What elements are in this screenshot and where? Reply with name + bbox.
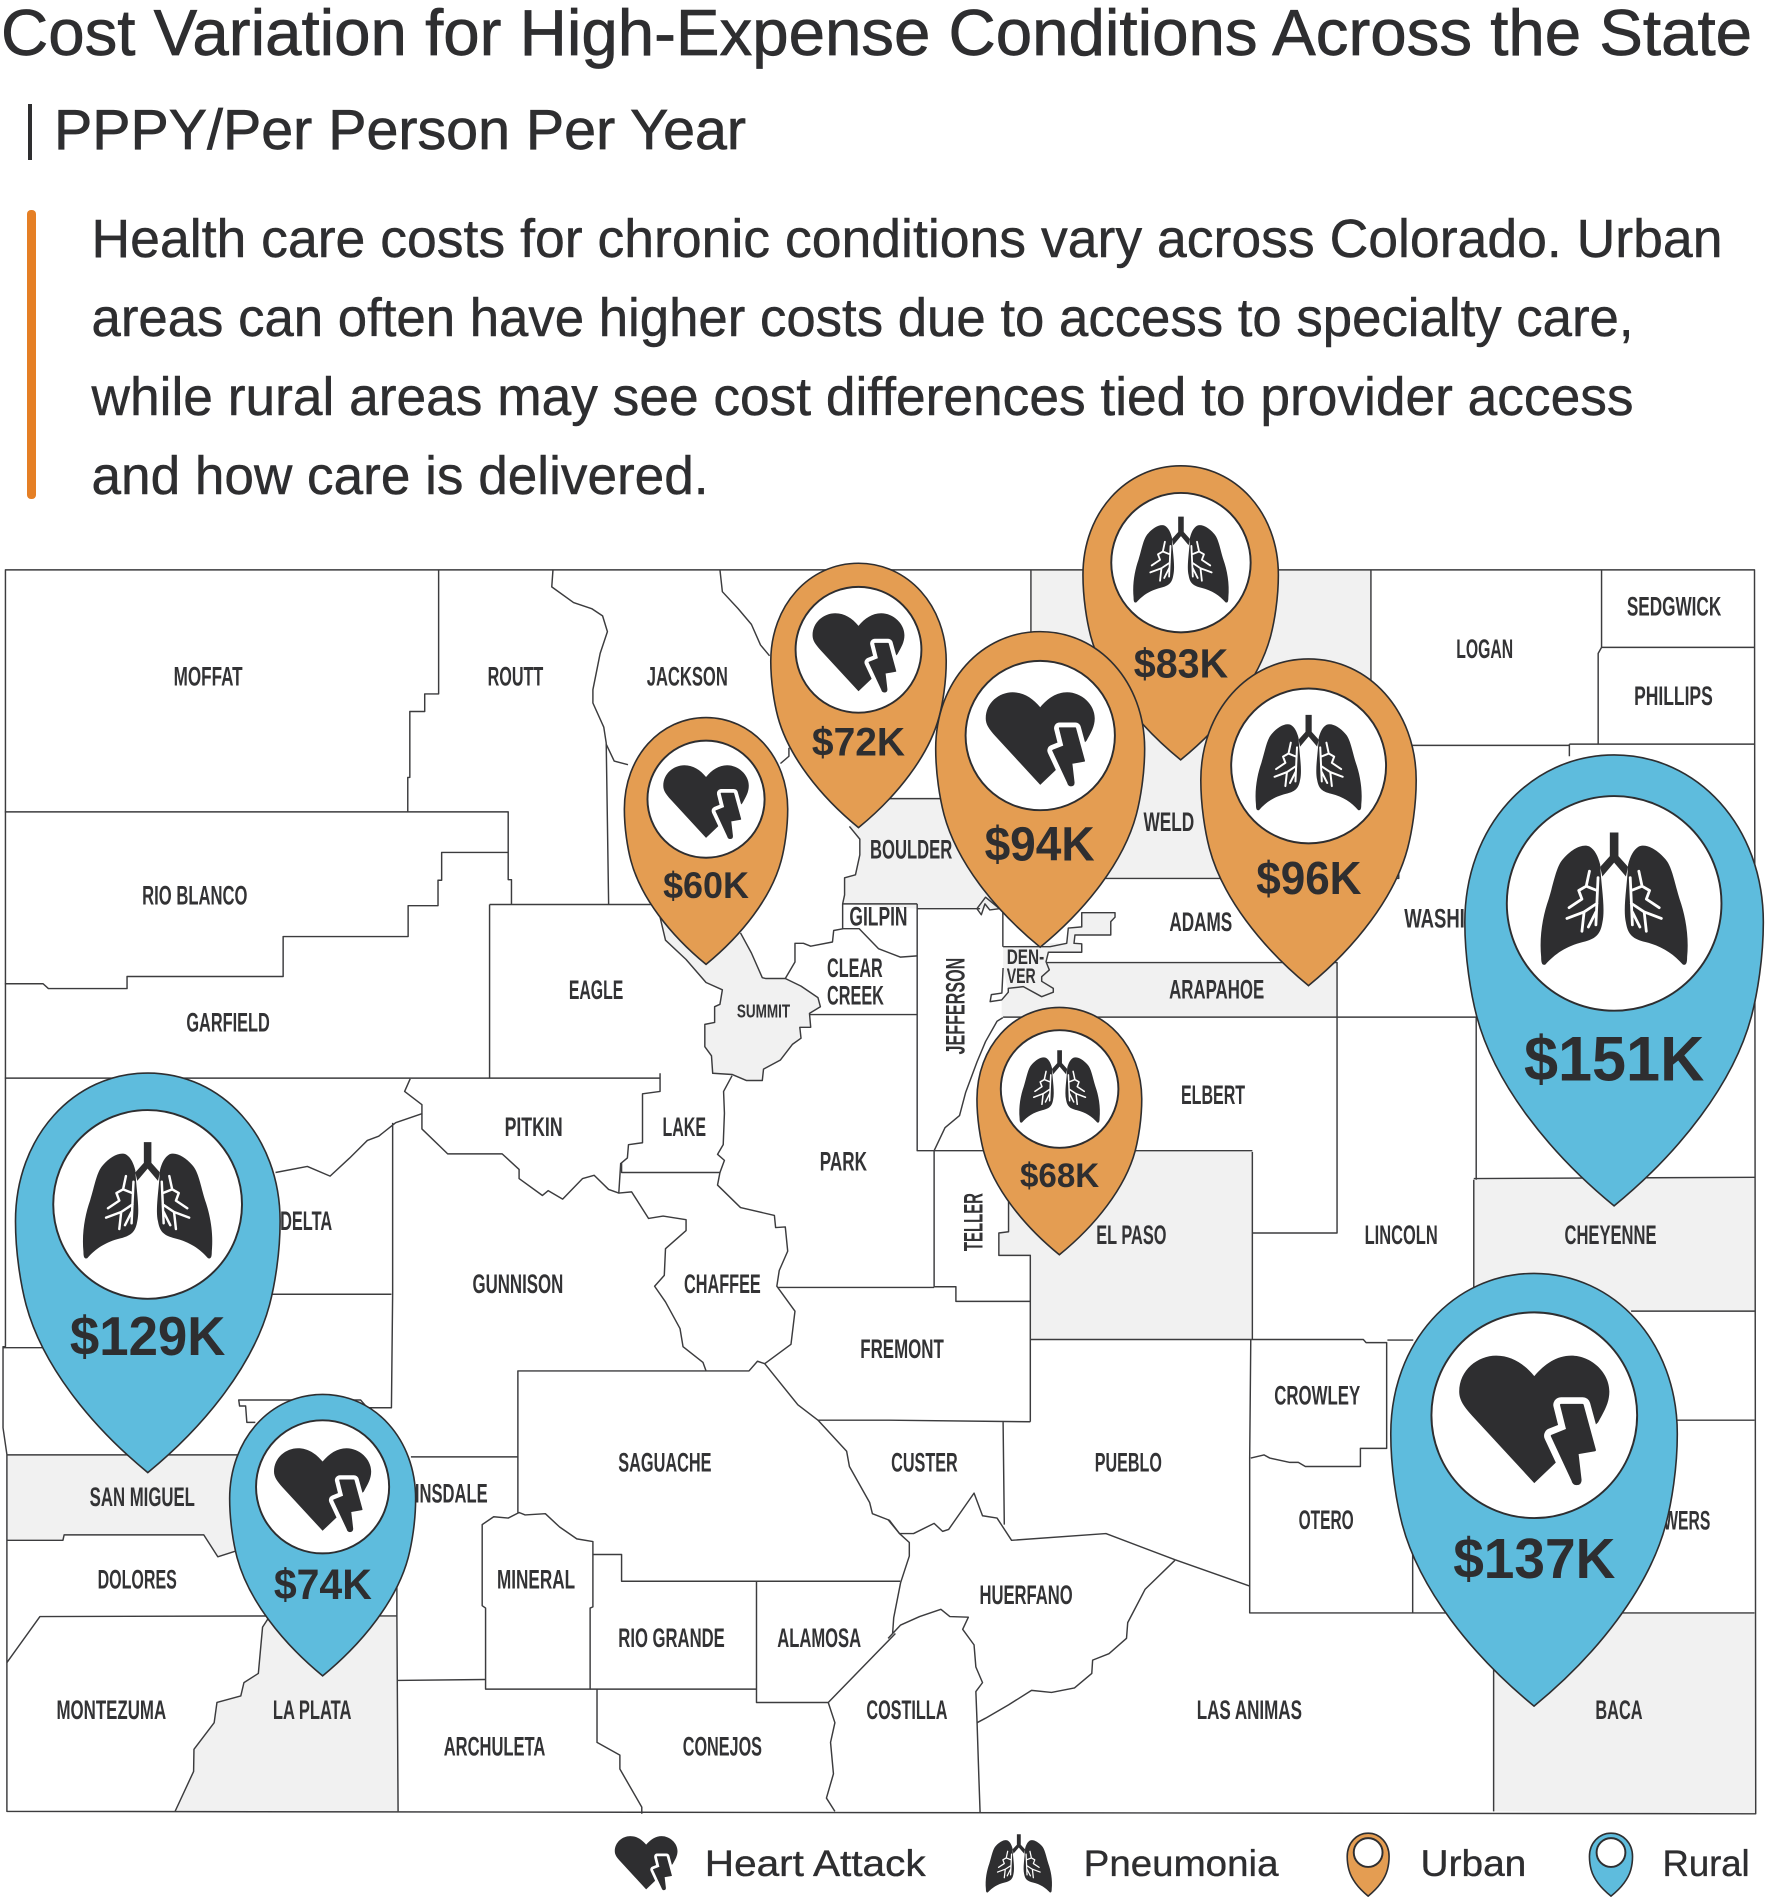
- county labels: VER: [1007, 964, 1036, 988]
- legend icon: pneumonia: [986, 1834, 1052, 1892]
- pin: rural pneumonia $151K: [1465, 755, 1763, 1206]
- county labels: PHILLIPS: [1634, 681, 1713, 711]
- county labels: EL PASO: [1096, 1220, 1166, 1250]
- county labels: SEDGWICK: [1627, 591, 1721, 621]
- county labels: HUERFANO: [979, 1580, 1073, 1610]
- county labels: COSTILLA: [866, 1695, 947, 1725]
- county labels: SAGUACHE: [618, 1447, 711, 1477]
- county labels: CUSTER: [891, 1447, 958, 1477]
- county labels: LAS ANIMAS: [1197, 1695, 1302, 1725]
- county labels: ROUTT: [488, 661, 543, 691]
- county labels: ALAMOSA: [777, 1623, 861, 1653]
- pin: urban pneumonia $83K: [1083, 466, 1278, 760]
- pin: urban heart attack $72K: [771, 563, 946, 828]
- pin: rural heart attack $137K: [1391, 1273, 1677, 1706]
- county labels: JACKSON: [647, 661, 728, 691]
- county labels: CHEYENNE: [1565, 1220, 1656, 1250]
- county labels: CHAFFEE: [684, 1269, 761, 1299]
- county labels: LOGAN: [1456, 634, 1513, 664]
- intro paragraph: while rural areas may see cost differences tied to provider access: [91, 368, 1634, 427]
- pin: rural pneumonia $129K: $129K: [70, 1306, 225, 1367]
- intro paragraph: Health care costs for chronic conditions vary across Colorado. Urban: [92, 210, 1722, 269]
- county labels: LAKE: [662, 1112, 706, 1142]
- county labels: RIO BLANCO: [142, 880, 247, 910]
- county labels: MINERAL: [497, 1565, 575, 1595]
- pin: urban heart attack $94K: [936, 632, 1145, 947]
- orange accent bar: [27, 210, 36, 499]
- legend icon: urban pin: [1347, 1833, 1389, 1896]
- pin: rural pneumonia $129K: [15, 1073, 280, 1473]
- county map of Colorado: [3, 570, 1756, 1814]
- county labels: CLEAR: [827, 953, 883, 983]
- county labels: CROWLEY: [1274, 1381, 1360, 1411]
- county labels: PUEBLO: [1095, 1447, 1162, 1477]
- pin: urban heart attack $72K: $72K: [812, 721, 905, 765]
- county labels: HINSDALE: [403, 1478, 488, 1508]
- county labels: [57, 591, 1721, 1762]
- pin: urban pneumonia $83K: $83K: [1134, 641, 1228, 687]
- county labels: ADAMS: [1169, 907, 1232, 937]
- county labels: CREEK: [827, 980, 884, 1010]
- county labels: WELD: [1143, 807, 1194, 837]
- county labels: LA PLATA: [273, 1695, 352, 1725]
- pin: urban heart attack $60K: [624, 718, 788, 964]
- county borders: [3, 570, 1756, 1814]
- intro paragraph: [91, 210, 1722, 506]
- county labels: PARK: [820, 1147, 867, 1177]
- legend: [615, 1833, 1750, 1896]
- county labels: SUMMIT: [737, 1002, 790, 1022]
- county labels: GUNNISON: [473, 1269, 563, 1299]
- subtitle: PPPY/Per Person Per Year: [54, 98, 746, 162]
- county labels: WASHINGTON: [1404, 904, 1531, 934]
- county labels: OTERO: [1299, 1505, 1354, 1535]
- county labels: LINCOLN: [1365, 1220, 1438, 1250]
- intro paragraph: areas can often have higher costs due to access to specialty care,: [92, 289, 1634, 348]
- county labels: ARAPAHOE: [1169, 975, 1264, 1005]
- county labels: DOLORES: [98, 1565, 177, 1595]
- pin: urban heart attack $60K: $60K: [663, 864, 749, 906]
- legend label: heart attack: Heart Attack: [705, 1842, 926, 1884]
- pin: urban heart attack $94K: $94K: [985, 818, 1095, 871]
- county labels: DELTA: [280, 1206, 332, 1236]
- county labels: GARFIELD: [186, 1008, 270, 1038]
- county labels: BOULDER: [870, 834, 952, 864]
- highlighted counties: [7, 570, 1756, 1814]
- legend label: pneumonia: Pneumonia: [1084, 1842, 1279, 1884]
- intro paragraph: and how care is delivered.: [92, 447, 708, 506]
- legend icon: heart attack: [615, 1836, 677, 1890]
- county labels: EAGLE: [569, 975, 623, 1005]
- county labels: JEFFERSON: [940, 958, 970, 1055]
- county labels: PITKIN: [505, 1112, 563, 1142]
- legend icon: rural pin: [1589, 1833, 1633, 1896]
- subtitle divider bar: [28, 104, 32, 160]
- county labels: RIO GRANDE: [618, 1623, 725, 1653]
- county labels: CONEJOS: [683, 1732, 762, 1762]
- pin: rural heart attack $137K: $137K: [1453, 1528, 1615, 1591]
- pin: rural heart attack $74K: $74K: [274, 1561, 372, 1608]
- pin: urban pneumonia $68K: [977, 1007, 1142, 1255]
- county labels: DEN-: [1007, 945, 1044, 969]
- county labels: ELBERT: [1181, 1080, 1245, 1110]
- legend label: urban: Urban: [1421, 1842, 1526, 1884]
- pin: urban pneumonia $96K: $96K: [1256, 852, 1361, 904]
- county labels: SAN MIGUEL: [90, 1482, 195, 1512]
- county labels: ARCHULETA: [444, 1732, 545, 1762]
- pin: urban pneumonia $96K: [1201, 659, 1416, 986]
- legend label: rural: Rural: [1663, 1842, 1750, 1884]
- county labels: GILPIN: [849, 902, 908, 932]
- county labels: TELLER: [959, 1193, 989, 1251]
- county labels: BACA: [1595, 1695, 1643, 1725]
- county labels: MONTEZUMA: [57, 1695, 166, 1725]
- pin: rural heart attack $74K: [230, 1394, 416, 1676]
- pin: urban pneumonia $68K: $68K: [1020, 1157, 1099, 1195]
- pin: rural pneumonia $151K: $151K: [1524, 1025, 1704, 1095]
- county labels: MOFFAT: [174, 661, 243, 691]
- county labels: FREMONT: [860, 1334, 944, 1364]
- county labels: PROWERS: [1629, 1505, 1710, 1535]
